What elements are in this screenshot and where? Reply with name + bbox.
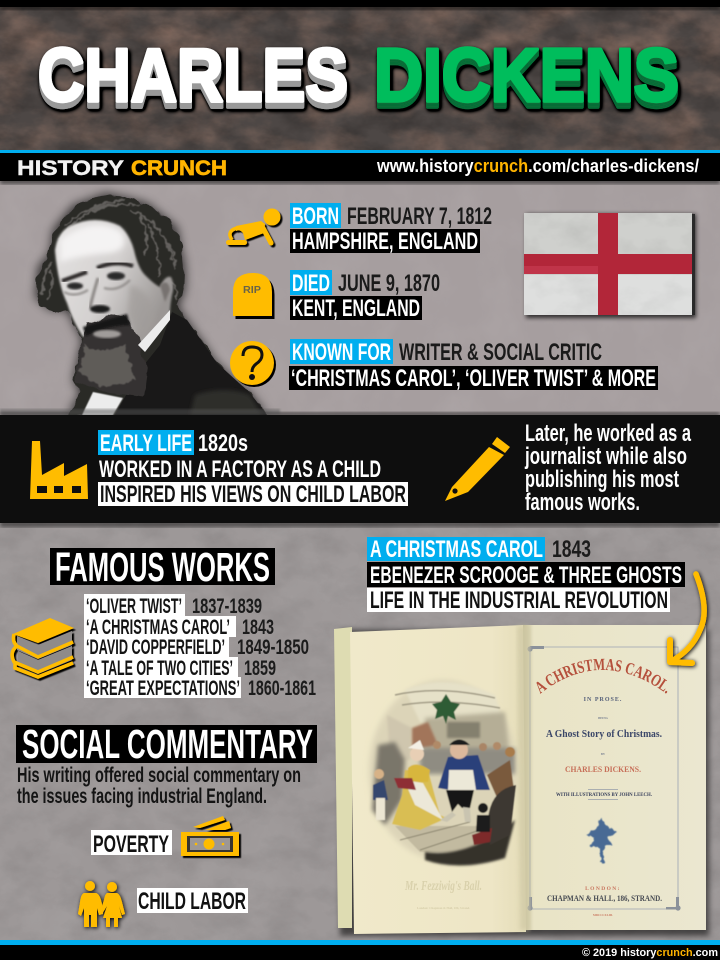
a christmas carol heading: 1843 <box>552 536 591 563</box>
born <box>290 203 492 255</box>
journalist note: famous works. <box>525 489 640 516</box>
born: FEBRUARY 7, 1812 <box>347 203 492 230</box>
right page: MDCCCXLIII. <box>593 913 613 917</box>
early life text <box>98 430 408 508</box>
brand logo: HISTORY <box>17 156 124 180</box>
famous works heading: FAMOUS WORKS <box>55 544 270 590</box>
right page <box>523 625 706 930</box>
works list: 1860-1861 <box>248 677 316 700</box>
poverty label: POVERTY <box>93 831 169 858</box>
copyright: © 2019 historycrunch.com <box>582 947 718 959</box>
died: KENT, ENGLAND <box>292 295 420 322</box>
signature: Mr. Fezziwig's Ball. <box>404 879 482 894</box>
icon: cash <box>181 816 239 856</box>
known for <box>289 339 658 392</box>
died <box>290 270 440 322</box>
right page: LONDON: <box>585 886 621 892</box>
portrait of Charles Dickens <box>0 193 280 415</box>
early life text: EARLY LIFE <box>100 430 192 457</box>
icon: tombstone <box>233 273 274 319</box>
arrow pointing to book <box>670 574 704 663</box>
ornament: holly <box>586 818 617 862</box>
title: DICKENS <box>374 33 679 117</box>
right page: CHAPMAN & HALL, 186, STRAND. <box>547 894 662 903</box>
born: BORN <box>292 203 339 230</box>
right page: BEING <box>598 716 608 720</box>
brand logo: CRUNCH <box>131 156 227 180</box>
works list <box>84 594 316 700</box>
social commentary heading <box>16 721 317 767</box>
website url: www.historycrunch.com/charles-dickens/ <box>376 156 699 176</box>
mistletoe <box>432 694 460 724</box>
early life band <box>0 415 720 523</box>
icon: factory <box>30 441 88 499</box>
poverty label <box>91 830 172 858</box>
works list: ‘GREAT EXPECTATIONS’ <box>86 677 240 700</box>
flag of England <box>524 213 696 318</box>
left page with frontispiece <box>350 625 530 934</box>
brand logo <box>17 156 227 180</box>
died: JUNE 9, 1870 <box>338 270 440 297</box>
crowd <box>420 741 515 774</box>
icon: crawling baby <box>226 208 280 245</box>
beard and moustache <box>75 313 147 397</box>
icon: tombstone: RIP <box>243 285 261 296</box>
known for: KNOWN FOR <box>292 339 391 366</box>
icon: pencil <box>445 437 510 501</box>
early life text: 1820s <box>198 430 248 457</box>
icon: question mark <box>230 341 276 387</box>
icon: stack of books <box>12 618 74 677</box>
right side figures <box>487 760 514 800</box>
works list: ‘DAVID COPPERFIELD’ <box>86 636 225 659</box>
died: DIED <box>292 270 330 297</box>
right page: CHARLES DICKENS. <box>565 764 641 774</box>
right page: WITH ILLUSTRATIONS BY JOHN LEECH. <box>556 793 653 798</box>
journalist note <box>524 420 691 516</box>
shirt collar and bow <box>82 310 170 415</box>
book cover edge <box>334 627 352 928</box>
title: CHARLES <box>38 33 348 117</box>
dancing man <box>438 755 490 790</box>
jacket <box>115 312 267 415</box>
illustration: Mr. Fezziwig's Ball <box>369 680 517 866</box>
right page: IN PROSE. <box>584 697 622 703</box>
early life text: WORKED IN A FACTORY AS A CHILD <box>99 456 381 483</box>
social commentary text <box>17 764 301 808</box>
early life text: INSPIRED HIS VIEWS ON CHILD LABOR <box>100 481 406 508</box>
born: HAMPSHIRE, ENGLAND <box>292 228 478 255</box>
hair highlights <box>42 200 177 300</box>
a christmas carol heading: A CHRISTMAS CAROL <box>370 536 543 563</box>
works list: 1859 <box>244 657 276 680</box>
works list: ‘OLIVER TWIST’ <box>86 595 182 618</box>
top banner <box>0 150 720 181</box>
right page: A Ghost Story of Christmas. <box>546 728 662 740</box>
works list: ‘A CHRISTMAS CAROL’ <box>86 616 230 639</box>
title <box>38 33 679 117</box>
works list: 1843 <box>242 616 274 639</box>
a christmas carol heading <box>367 536 685 614</box>
right page: A CHRISTMAS CAROL. <box>536 658 668 694</box>
header texture background <box>0 0 720 150</box>
works list: ‘A TALE OF TWO CITIES’ <box>86 657 233 680</box>
page body background <box>0 178 720 940</box>
known for: WRITER & SOCIAL CRITIC <box>399 339 602 366</box>
open book: A Christmas Carol <box>334 624 712 940</box>
left page with frontispiece: London: Chapman & Hall, 186, Strand. <box>417 906 470 910</box>
right page: BY <box>601 752 606 756</box>
social commentary text: His writing offered social commentary on <box>17 764 301 787</box>
famous works heading <box>50 544 275 590</box>
face <box>55 220 173 347</box>
social commentary text: the issues facing industrial England. <box>17 785 267 808</box>
social commentary heading: SOCIAL COMMENTARY <box>22 721 313 767</box>
icon: children <box>78 881 125 927</box>
title page text <box>540 670 672 698</box>
child labor label: CHILD LABOR <box>138 888 246 915</box>
works list: 1837-1839 <box>192 595 262 618</box>
dancing woman <box>392 770 447 830</box>
floor and shadow <box>395 826 490 852</box>
footer <box>0 940 720 960</box>
child labor label <box>137 888 248 915</box>
works list: 1849-1850 <box>237 636 309 659</box>
boy <box>373 780 388 800</box>
